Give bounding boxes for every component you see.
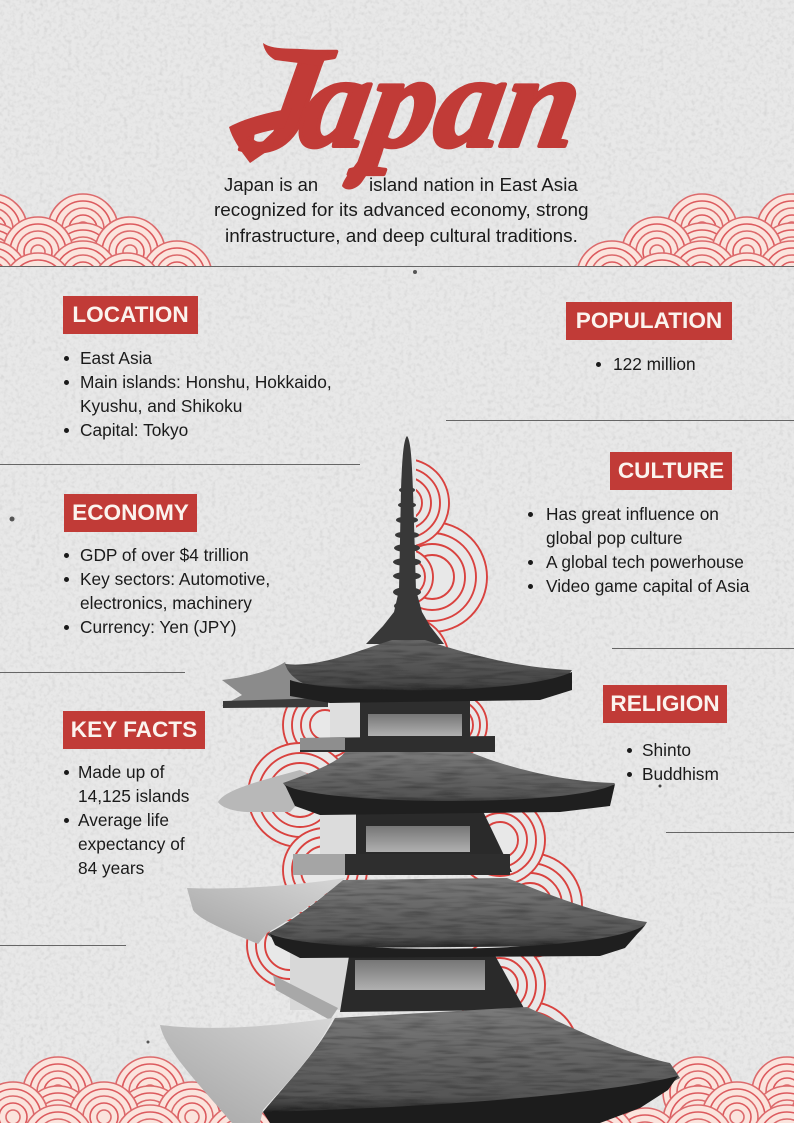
wave pattern: top right <box>578 193 794 266</box>
list: economy: electronics, machinery <box>80 593 252 613</box>
roof 4 <box>160 1007 680 1123</box>
intro text: Japan is an <box>224 174 318 195</box>
list: location: Main islands: Honshu, Hokkaido, <box>80 372 332 392</box>
panel: economy <box>64 494 270 637</box>
panel: location <box>63 296 332 440</box>
list: population: 122 million <box>613 354 696 374</box>
list: culture: Video game capital of Asia <box>546 576 749 596</box>
roof 3 <box>187 878 647 958</box>
list: religion: Buddhism <box>642 764 719 784</box>
wave pattern: bottom left <box>0 1057 275 1123</box>
intro text: recognized for its advanced economy, strong <box>214 200 589 221</box>
intro text: island nation in East Asia <box>369 174 578 195</box>
roof 2 <box>218 752 615 815</box>
heading: culture: CULTURE <box>618 458 724 483</box>
list: economy: Currency: Yen (JPY) <box>80 617 237 637</box>
title: J <box>233 16 343 183</box>
list: key facts: 84 years <box>78 858 144 878</box>
title <box>229 16 593 189</box>
list: location <box>64 348 332 440</box>
panel: religion <box>603 685 727 784</box>
list: key facts: Average life <box>78 810 169 830</box>
list: key facts <box>64 762 189 878</box>
heading: religion <box>603 685 727 723</box>
list: key facts: expectancy of <box>78 834 185 854</box>
panel: key facts <box>63 711 205 878</box>
roof 1 <box>222 640 572 708</box>
list: key facts: Made up of <box>78 762 164 782</box>
heading: population: POPULATION <box>576 308 722 333</box>
intro text <box>214 174 589 247</box>
heading: economy: ECONOMY <box>72 500 189 525</box>
heading: economy <box>64 494 197 532</box>
heading: key facts <box>63 711 205 749</box>
pagoda illustration <box>160 436 680 1123</box>
storey 2 <box>293 805 512 875</box>
heading: key facts: KEY FACTS <box>71 717 197 742</box>
list: location: Kyushu, and Shikoku <box>80 396 242 416</box>
title: apan <box>291 28 593 175</box>
list: economy: Key sectors: Automotive, <box>80 569 270 589</box>
rule lines <box>0 266 794 946</box>
heading: population <box>566 302 732 340</box>
wave pattern: top left <box>0 193 212 266</box>
list: religion: Shinto <box>642 740 691 760</box>
heading: location <box>63 296 198 334</box>
storey 1 <box>300 695 495 752</box>
list: location: East Asia <box>80 348 152 368</box>
list: culture: A global tech powerhouse <box>546 552 744 572</box>
list: culture: Has great influence on <box>546 504 719 524</box>
list: economy <box>64 545 270 637</box>
intro text: infrastructure, and deep cultural traditions. <box>225 226 578 247</box>
list: culture <box>528 504 750 596</box>
list: culture: global pop culture <box>546 528 682 548</box>
spire <box>366 436 444 644</box>
storey 3 <box>273 950 525 1020</box>
list: location: Capital: Tokyo <box>80 420 188 440</box>
list: economy: GDP of over $4 trillion <box>80 545 249 565</box>
red arcs behind pagoda <box>247 459 582 1098</box>
heading: culture <box>610 452 732 490</box>
list: religion <box>627 740 719 784</box>
wave pattern: bottom right <box>565 1057 794 1123</box>
panel: culture <box>528 452 750 596</box>
list: key facts: 14,125 islands <box>78 786 189 806</box>
heading: location: LOCATION <box>72 302 189 327</box>
heading: religion: RELIGION <box>610 691 720 716</box>
panel: population <box>566 302 732 374</box>
